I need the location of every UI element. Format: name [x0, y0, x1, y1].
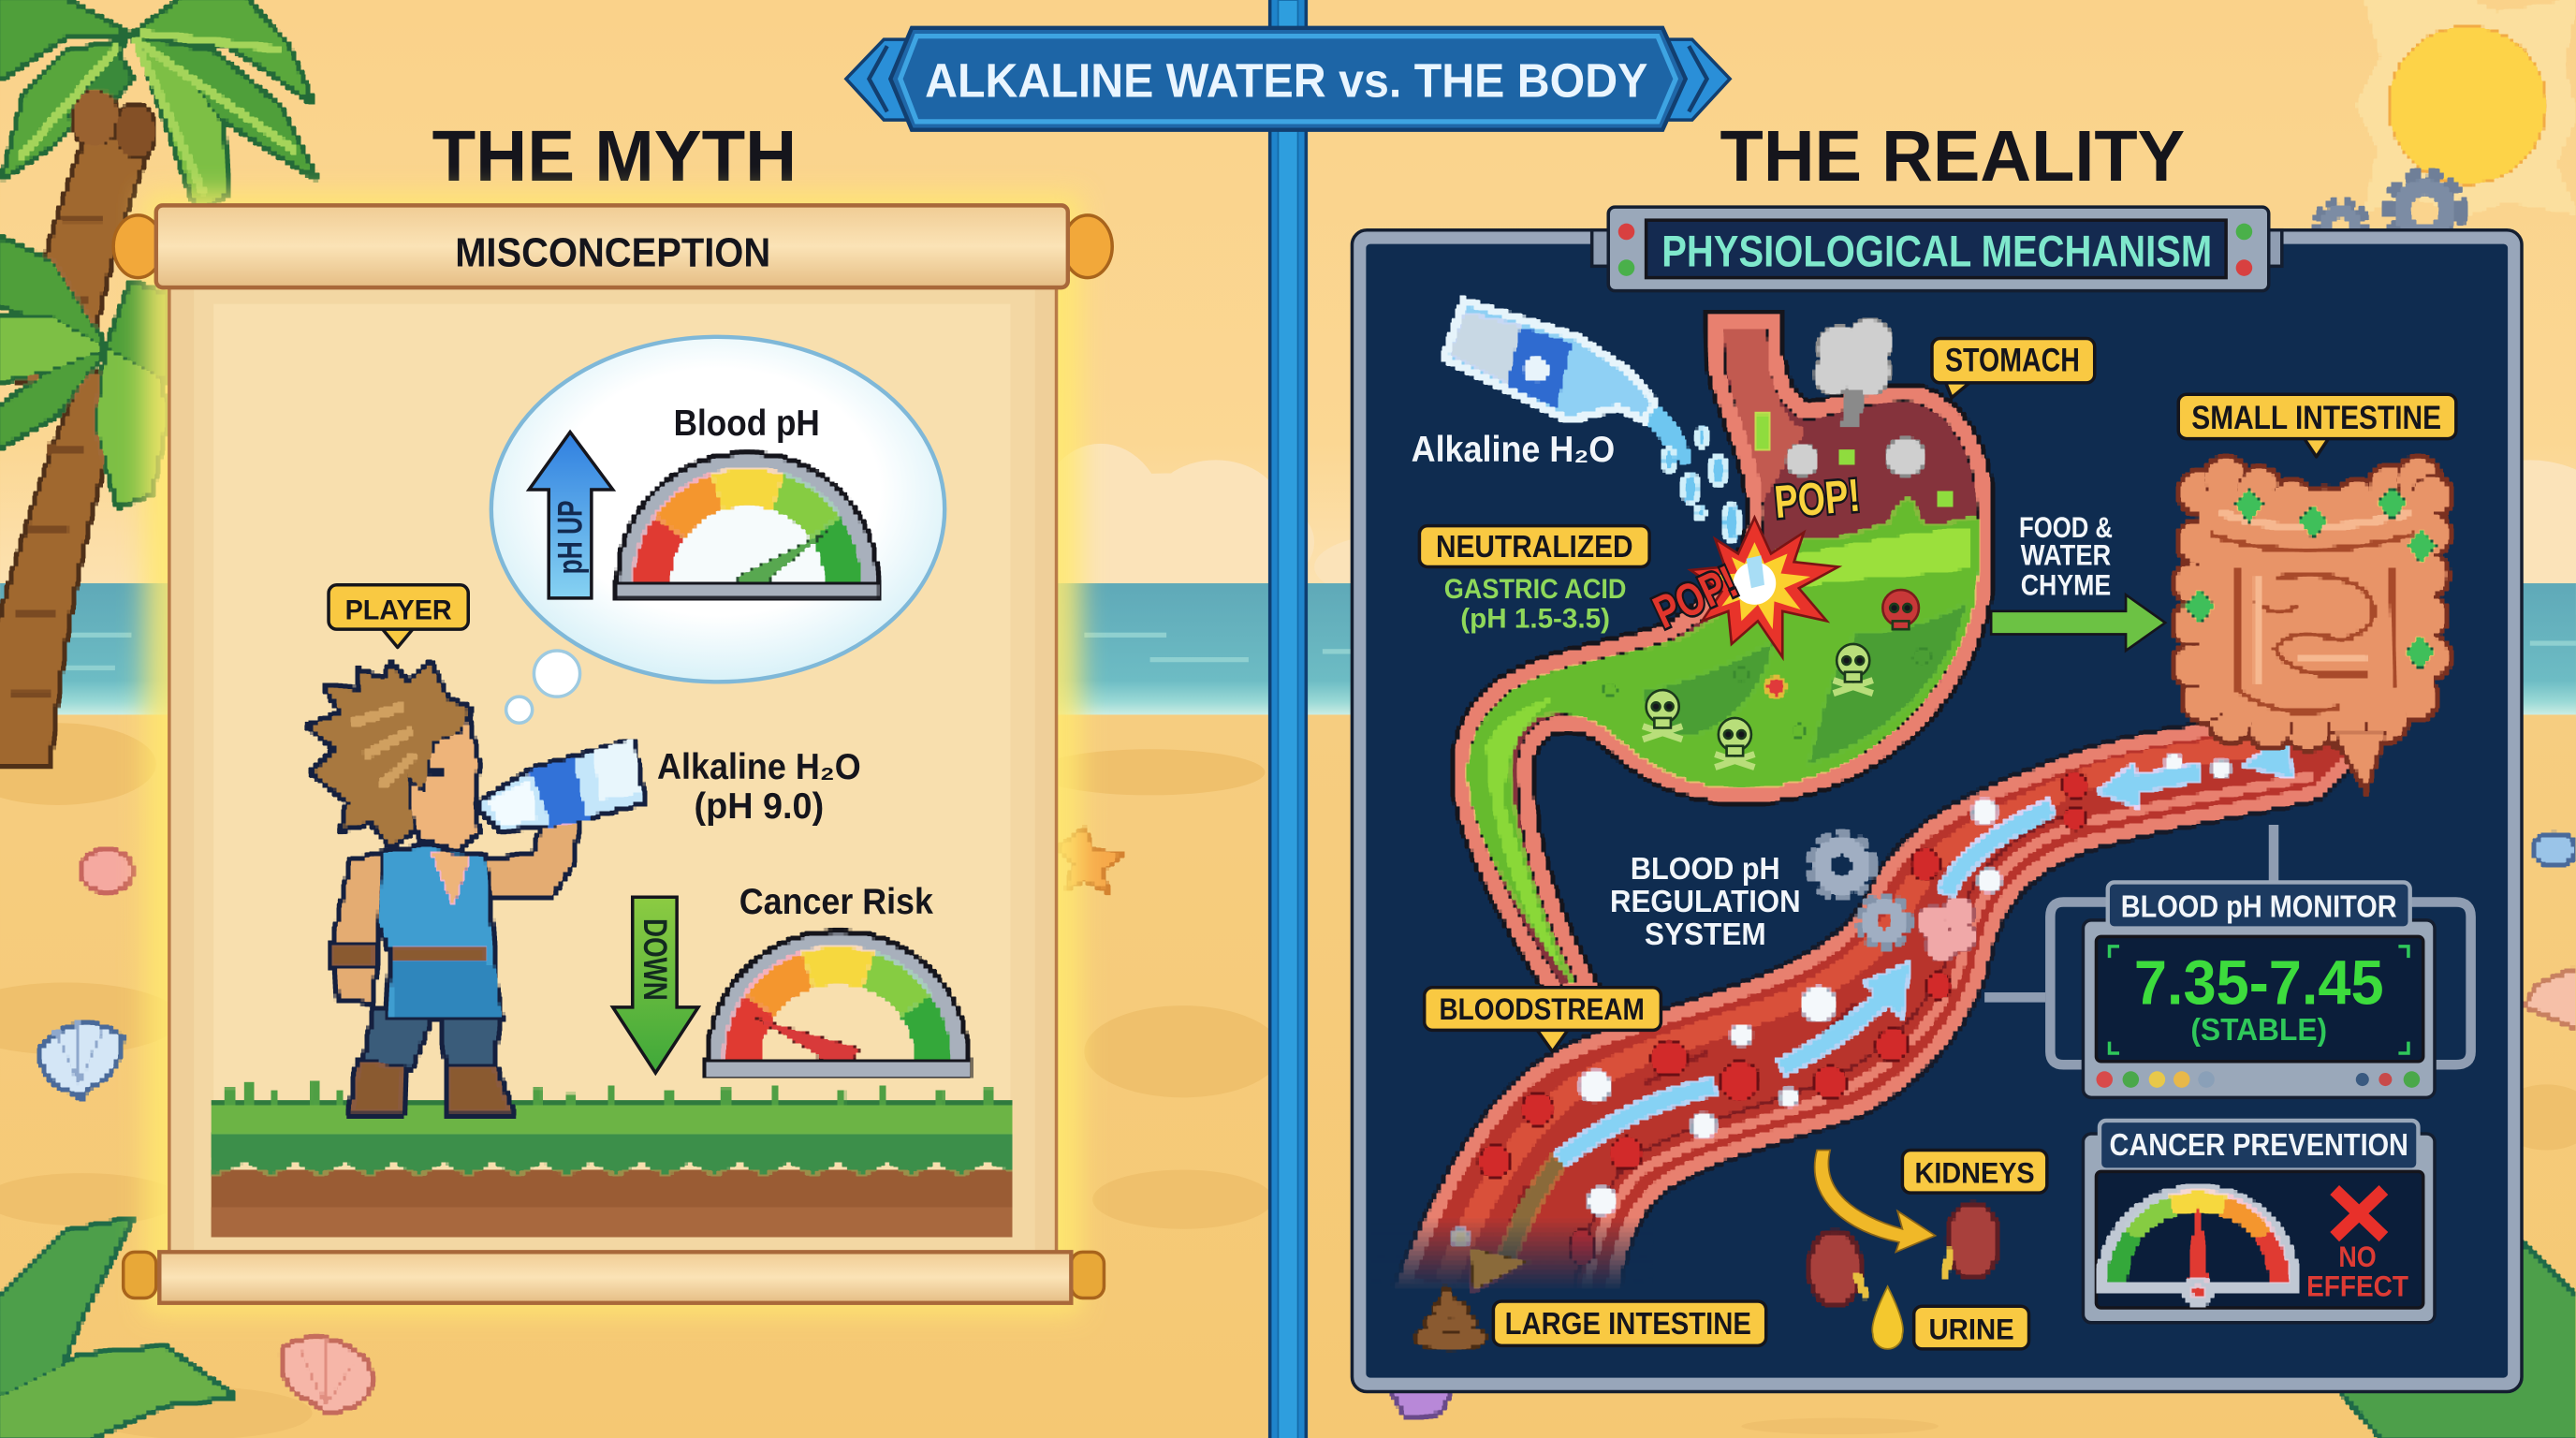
arrow: down — [613, 897, 698, 1073]
brown waste stream — [1503, 1160, 1559, 1265]
label: food and water chyme: WATER — [2021, 538, 2111, 572]
title text: ALKALINE WATER vs. THE BODY — [925, 54, 1647, 108]
scroll heading: MISCONCEPTION — [455, 229, 770, 275]
label: no effect: EFFECT — [2306, 1269, 2408, 1303]
label: alkaline water: Alkaline H₂O — [657, 747, 861, 787]
tag: bloodstream: BLOODSTREAM — [1439, 992, 1645, 1026]
gauge label: cancer risk: Cancer Risk — [739, 882, 933, 922]
small intestine — [2174, 459, 2452, 788]
tag: neutralized: NEUTRALIZED — [1436, 530, 1633, 565]
tag: player: PLAYER — [345, 595, 452, 626]
arrow: to kidneys — [1815, 1151, 1935, 1252]
tag: stomach — [1932, 339, 2095, 398]
label: blood pH regulation system: REGULATION — [1610, 885, 1801, 919]
panel header: physiological mechanism: PHYSIOLOGICAL MECHANISM — [1661, 227, 2212, 276]
face — [402, 707, 478, 849]
raised arm — [487, 814, 578, 897]
stomach with acid — [1460, 322, 1984, 994]
label: food and water chyme — [2019, 510, 2113, 601]
thought bubble — [491, 337, 944, 723]
label: food and water chyme: FOOD & — [2019, 510, 2113, 544]
tag: stomach: STOMACH — [1945, 343, 2080, 379]
panel: cancer prevention — [2083, 1121, 2435, 1323]
pop effect yellow: POP! — [1773, 471, 1862, 528]
player character drinking water — [309, 664, 644, 1114]
pop effect red: POP! — [1647, 557, 1745, 638]
panel: misconception scroll — [113, 194, 1112, 1314]
ground: grass and dirt — [213, 1083, 1010, 1236]
palm trees — [0, 0, 315, 764]
monitor screen: (STABLE) — [2190, 1013, 2327, 1048]
label: food and water chyme: CHYME — [2021, 567, 2111, 601]
center divider — [1268, 0, 1308, 1438]
trousers — [365, 1010, 500, 1068]
tag: small intestine — [2178, 394, 2456, 457]
label: alkaline water — [657, 747, 861, 827]
top scroll roller — [113, 205, 1112, 287]
label: no effect — [2306, 1240, 2408, 1303]
monitor connecting pipes — [1984, 825, 2471, 1064]
label: alkaline water: (pH 9.0) — [695, 786, 824, 827]
tag: large intestine: LARGE INTESTINE — [1505, 1307, 1751, 1342]
monitor screen: 7.35-7.45 — [2134, 948, 2384, 1018]
panel: physiological mechanism — [1352, 178, 2522, 1392]
gauge: neutral needle — [2097, 1189, 2299, 1306]
beach leaves bottom corners — [0, 1219, 2576, 1438]
arrow: pH up: pH UP — [550, 500, 589, 574]
heading: the reality: THE REALITY — [1720, 116, 2185, 197]
monitor indicator lights — [2096, 1071, 2420, 1088]
kidneys — [1810, 1204, 1998, 1304]
cancer prevention header — [2100, 1121, 2418, 1170]
bottom scroll roller — [124, 1252, 1104, 1303]
tag: urine: URINE — [1928, 1312, 2014, 1345]
gauge: cancer risk low — [707, 930, 970, 1077]
boots — [350, 1060, 513, 1114]
monitor header — [2108, 882, 2410, 929]
decorative seashells and starfish — [39, 829, 2576, 1416]
tunic — [374, 846, 501, 1019]
clouds and horizon haze — [1018, 444, 2576, 624]
panel: blood pH monitor — [2083, 882, 2435, 1097]
icon: urine drop — [1872, 1286, 1903, 1349]
icon: stool — [1416, 1288, 1486, 1349]
skulls in acid — [1643, 590, 1919, 768]
gears on top of frame — [2320, 178, 2458, 248]
label: no effect: NO — [2338, 1240, 2377, 1273]
gauge: blood pH high — [616, 452, 879, 598]
bottle — [476, 741, 644, 829]
sun — [2358, 0, 2576, 213]
tag: bloodstream — [1425, 988, 1661, 1051]
label: blood pH regulation system: BLOOD pH — [1631, 852, 1780, 887]
tag: player — [329, 585, 468, 647]
arrow: pH up — [529, 433, 613, 598]
blood vessel — [1372, 710, 2365, 1318]
left arm — [335, 855, 381, 1003]
tag: kidneys: KIDNEYS — [1915, 1156, 2035, 1190]
heading: the myth: THE MYTH — [432, 116, 797, 197]
cancer prevention screen — [2096, 1171, 2423, 1308]
cancer prevention header: CANCER PREVENTION — [2110, 1128, 2408, 1163]
explosion burst — [1690, 518, 1838, 657]
blue stream — [1559, 994, 1888, 1160]
tag: small intestine: SMALL INTESTINE — [2191, 400, 2441, 436]
gastric acid label: GASTRIC ACID — [1444, 574, 1627, 605]
title banner — [846, 28, 1730, 130]
smoke clouds — [1788, 320, 1924, 475]
monitor header: BLOOD pH MONITOR — [2121, 889, 2397, 924]
label: alkaline water: Alkaline H₂O — [1412, 430, 1615, 470]
monitor screen — [2096, 936, 2423, 1062]
regulation gears — [1815, 840, 1975, 960]
gauge label: blood pH: Blood pH — [674, 404, 820, 444]
gastric acid label: (pH 1.5-3.5) — [1460, 603, 1610, 634]
label: blood pH regulation system: SYSTEM — [1645, 917, 1766, 952]
hair — [309, 664, 470, 846]
icon: red cross — [2339, 1195, 2378, 1232]
panel header: physiological mechanism — [1592, 207, 2282, 291]
metal frame — [1358, 237, 2515, 1385]
label: blood pH regulation system — [1610, 852, 1801, 952]
tag: urine — [1914, 1306, 2029, 1349]
arrow: to small intestine — [1991, 594, 2165, 651]
arrow: down: DOWN — [637, 918, 673, 1001]
scroll paper — [169, 279, 1057, 1262]
water bottle pouring — [1444, 301, 1740, 540]
gastric acid label — [1444, 574, 1627, 634]
